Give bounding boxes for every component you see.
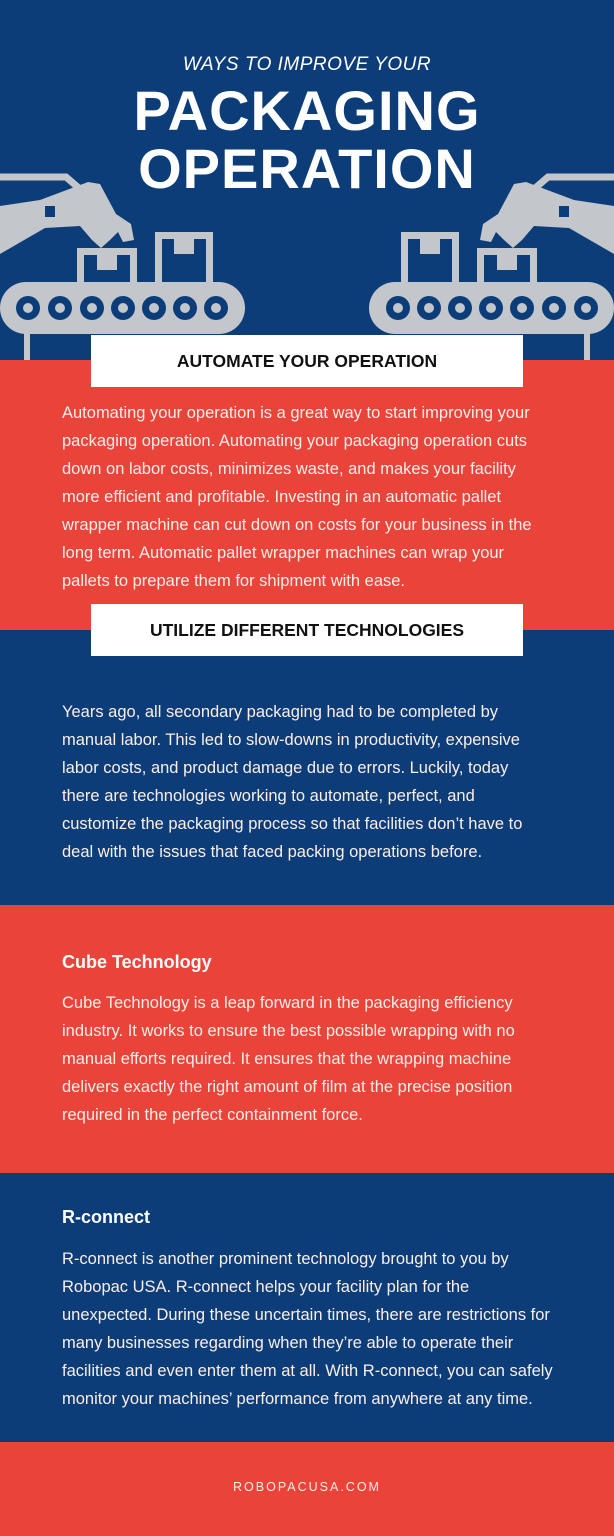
text: automate body: wrapper machine can cut down on costs for your business in the — [62, 516, 532, 534]
title: OPERATION — [138, 137, 476, 200]
title: PACKAGING — [133, 79, 481, 142]
text: technologies body: there are technologies working to automate, perfect, and — [62, 787, 475, 805]
illustration: right conveyor robot — [369, 174, 614, 360]
text: cube body: manual efforts required. It ensures that the wrapping machine — [62, 1050, 511, 1068]
illustration: left conveyor robot — [0, 174, 245, 360]
text: technologies body: Years ago, all secondary packaging had to be completed by — [62, 703, 498, 721]
text: cube body: delivers exactly the right amount of film at the precise position — [62, 1078, 512, 1096]
text: cube body: Cube Technology is a leap forward in the packaging efficiency — [62, 994, 513, 1012]
text: technologies body: manual labor. This led to slow-downs in productivity, expensive — [62, 731, 520, 749]
text: automate body: Automating your operation is a great way to start improving your — [62, 404, 530, 422]
heading box: automate: AUTOMATE YOUR OPERATION — [177, 351, 437, 371]
text: cube body: required in the perfect containment force. — [62, 1106, 363, 1124]
text: automate body: long term. Automatic pallet wrapper machines can wrap your — [62, 544, 504, 562]
title — [133, 79, 481, 200]
text: r-connect body: Robopac USA. R-connect helps your facility plan for the — [62, 1278, 469, 1296]
footer url: ROBOPACUSA.COM — [233, 1480, 381, 1494]
text: technologies body: customize the packaging process so that facilities don’t have to — [62, 815, 522, 833]
band: footer — [0, 1442, 614, 1536]
text: cube body — [62, 994, 515, 1124]
band: cube — [0, 905, 614, 1173]
subtitle: WAYS TO IMPROVE YOUR — [183, 54, 431, 75]
text: cube body: industry. It works to ensure the best possible wrapping with no — [62, 1022, 515, 1040]
band: automate — [0, 360, 614, 630]
text: automate body: packaging operation. Automating your packaging operation cuts — [62, 432, 527, 450]
band: header — [0, 0, 614, 360]
text: technologies body — [62, 703, 522, 861]
text: automate body — [62, 404, 532, 590]
text: r-connect body: R-connect is another prominent technology brought to you by — [62, 1250, 509, 1268]
heading box: technologies — [91, 604, 523, 656]
band: rconnect — [0, 1173, 614, 1442]
text: technologies body: labor costs, and product damage due to errors. Luckily, today — [62, 759, 508, 777]
text: r-connect body: facilities and even enter them at all. With R-connect, you can safely — [62, 1362, 553, 1380]
text: automate body: more efficient and profitable. Investing in an automatic pallet — [62, 488, 501, 506]
band: technologies — [0, 630, 614, 905]
text: r-connect body: monitor your machines’ performance from anywhere at any time. — [62, 1390, 533, 1408]
text: technologies body: deal with the issues that faced packing operations before. — [62, 843, 482, 861]
text: r-connect body — [62, 1250, 553, 1408]
text: r-connect body: unexpected. During these uncertain times, there are restrictions for — [62, 1306, 550, 1324]
heading: cube technology: Cube Technology — [62, 952, 212, 972]
text: automate body: down on labor costs, minimizes waste, and makes your facility — [62, 460, 516, 478]
text: automate body: pallets to prepare them for shipment with ease. — [62, 572, 405, 590]
text: r-connect body: many businesses regarding when they’re able to operate their — [62, 1334, 513, 1352]
heading box: technologies: UTILIZE DIFFERENT TECHNOLOGIES — [150, 620, 464, 640]
heading box: automate — [91, 335, 523, 387]
heading: r-connect: R-connect — [62, 1207, 150, 1227]
